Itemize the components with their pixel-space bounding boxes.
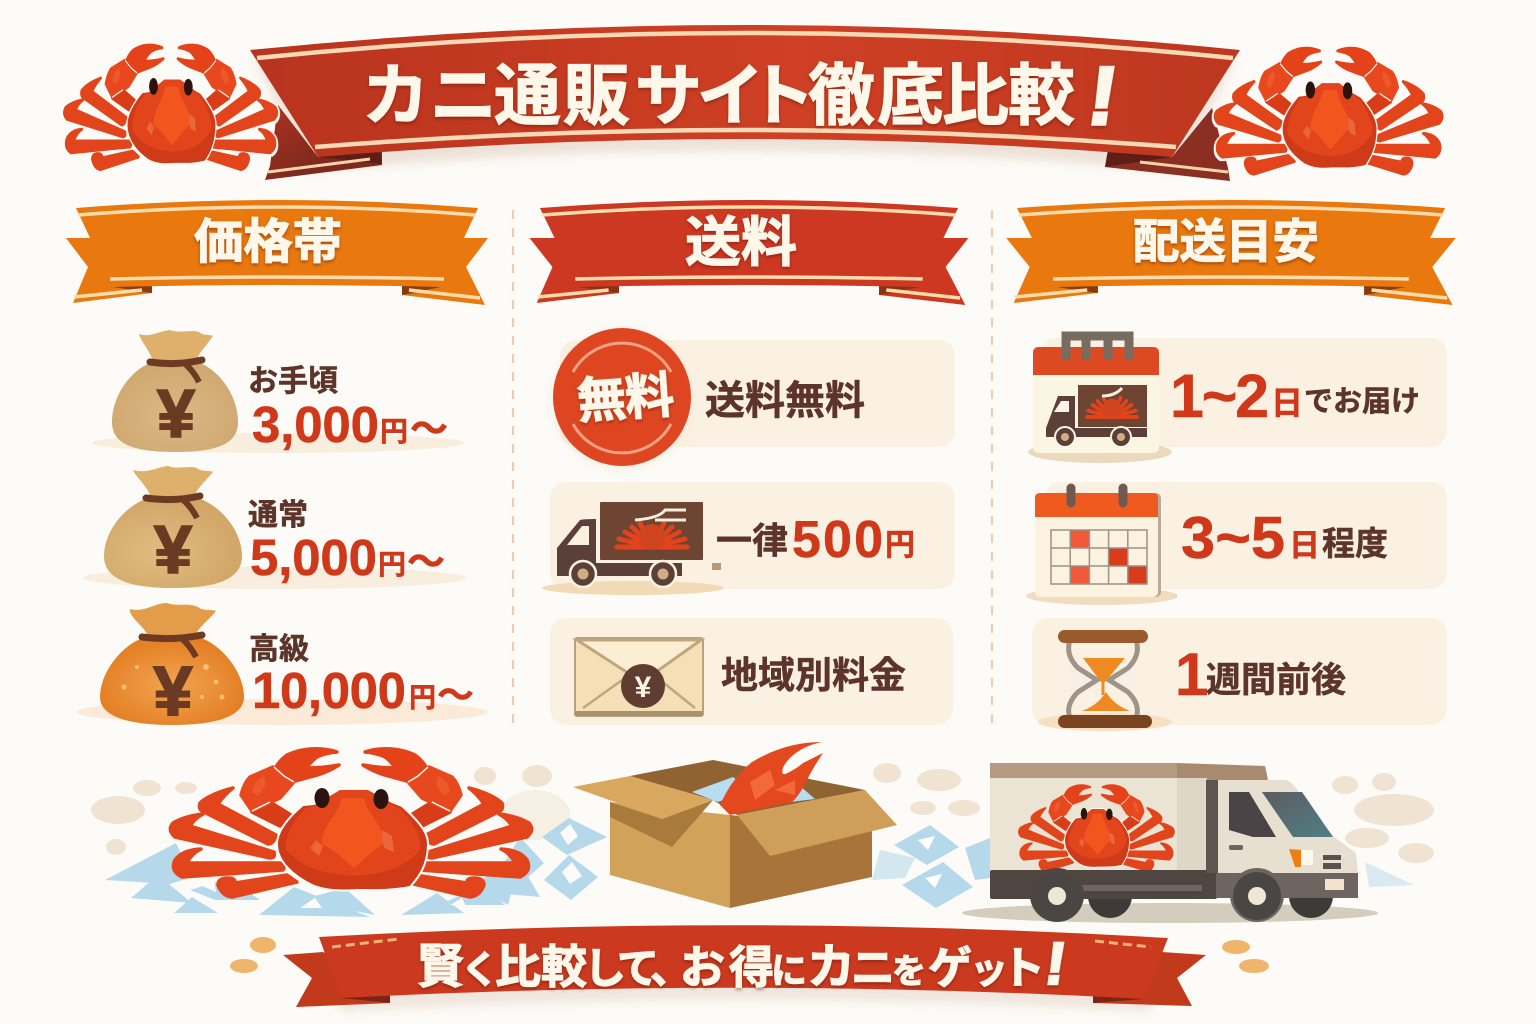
- banner tails: [265, 105, 1230, 181]
- icon: envelope: [575, 638, 703, 716]
- column: price: [66, 200, 488, 730]
- panel: [560, 340, 955, 447]
- label: お手頃: [248, 356, 338, 400]
- heading ribbon: delivery: 配送目安: [1133, 203, 1319, 272]
- banner shadow: [330, 942, 1160, 1012]
- divider left: [512, 210, 514, 728]
- shadow: [77, 699, 487, 725]
- box interior: [630, 760, 865, 815]
- slogan: ト: [1001, 932, 1045, 996]
- scene: beige blobs: [91, 763, 1434, 863]
- crab right: [1215, 48, 1442, 174]
- crab claw: [720, 742, 823, 815]
- box front: [610, 802, 730, 908]
- unit: 日: [1271, 378, 1303, 424]
- icon: calendar: [1026, 488, 1178, 605]
- icon: money bag large: [100, 603, 244, 730]
- label: 高級: [249, 624, 309, 668]
- slogan: カ: [807, 927, 855, 997]
- wheels: [1030, 868, 1284, 922]
- number: 3~5: [1181, 505, 1285, 571]
- icon: money bag medium: [104, 466, 242, 588]
- banner shadow: [255, 35, 1235, 172]
- item: premium: [77, 603, 487, 730]
- slogan: して、: [584, 935, 692, 996]
- text: 程度: [1322, 517, 1388, 565]
- slogan: を: [892, 944, 926, 993]
- badge: free: 無料: [574, 356, 676, 433]
- ice in box: [692, 777, 815, 802]
- windshield: [1262, 792, 1333, 837]
- divider right: [991, 210, 993, 728]
- slogan: お得: [680, 931, 774, 996]
- item: affordable: [92, 330, 464, 453]
- slogan: 賢: [417, 928, 464, 997]
- banner body: [250, 25, 1240, 157]
- slogan: ッ: [970, 939, 1008, 994]
- panel: [550, 482, 955, 589]
- item: regional: [550, 618, 953, 725]
- text: 送料無料: [705, 368, 865, 426]
- shadow: [83, 567, 467, 589]
- chassis: [990, 870, 1217, 899]
- crab bottom: [170, 749, 532, 897]
- title exclamation: !: [1083, 50, 1123, 142]
- panel: [1040, 338, 1447, 447]
- slogan exclamation: !: [1041, 929, 1071, 997]
- text: 地域別料金: [721, 645, 906, 699]
- number: 1: [1175, 641, 1208, 708]
- price: 500: [792, 511, 883, 569]
- price: 10,000: [252, 662, 406, 719]
- text: 週間前後: [1206, 652, 1346, 703]
- icon: envelope: ¥: [635, 671, 652, 704]
- icon: money bag medium: ¥: [154, 512, 192, 588]
- icon: money bag small: [112, 330, 238, 452]
- shadow: [92, 433, 464, 453]
- item: about 1 week: [1032, 618, 1447, 731]
- heading ribbon: shipping: [530, 198, 968, 305]
- unit: 円: [380, 410, 408, 450]
- panel: [1045, 482, 1447, 589]
- item: 3-5 days: [1026, 482, 1447, 605]
- heading ribbon: delivery: [1006, 200, 1456, 305]
- side window: [1229, 792, 1276, 837]
- cab: [1206, 780, 1358, 873]
- item: 1-2 days: [1028, 336, 1447, 463]
- scene: ice left: [105, 818, 607, 917]
- unit: 日: [1289, 520, 1320, 565]
- crab logo: [1019, 785, 1174, 871]
- scene: ice right: [872, 825, 1414, 908]
- ground shadow: [962, 903, 1378, 923]
- slogan: 比較: [495, 931, 587, 997]
- slogan: に: [771, 942, 807, 994]
- panel: [550, 618, 953, 725]
- sparkles: [122, 664, 224, 700]
- icon: calendar truck: [1028, 336, 1172, 463]
- heading ribbon: shipping: 送料: [685, 198, 797, 277]
- text: 一律: [716, 512, 788, 564]
- unit: 円: [378, 543, 406, 583]
- coins left: [230, 937, 276, 973]
- column: shipping: [530, 198, 968, 725]
- rear inner wheels: [1088, 874, 1333, 918]
- column: delivery: [1006, 200, 1456, 731]
- box with claw: [573, 742, 897, 908]
- slogan: く: [461, 939, 499, 994]
- item: free shipping: [553, 328, 955, 468]
- badge: free: [553, 328, 691, 468]
- title: カニ通販サイト徹底比較: [362, 42, 1075, 139]
- price: 5,000: [250, 529, 377, 586]
- price: 3,000: [252, 396, 379, 453]
- icon: money bag small: ¥: [157, 376, 195, 452]
- item: flat rate: [542, 482, 955, 595]
- item: regular: [83, 466, 467, 589]
- box flaps: [573, 776, 713, 819]
- box side: [730, 815, 872, 908]
- number: 1~2: [1170, 362, 1269, 430]
- icon: truck: [542, 502, 724, 595]
- crab left: [64, 45, 277, 170]
- label: 通常: [248, 490, 308, 534]
- handle, lights, grille, plate: [1229, 845, 1344, 890]
- ice flecks: [200, 824, 582, 908]
- tilde: 〜: [407, 531, 445, 586]
- banner body: [319, 925, 1168, 999]
- slogan: ゲ: [928, 932, 972, 996]
- cargo box: [990, 763, 1180, 870]
- panel: [1032, 618, 1447, 725]
- icon: money bag large: ¥: [154, 652, 193, 730]
- slogan: ニ: [851, 932, 895, 996]
- coins right: [1222, 940, 1269, 973]
- tilde: 〜: [437, 665, 474, 719]
- title banner: [250, 25, 1240, 181]
- text: でお届け: [1304, 378, 1420, 420]
- unit: 円: [409, 676, 436, 715]
- tilde: 〜: [410, 398, 448, 453]
- delivery truck: [962, 763, 1378, 923]
- icon: hourglass: [1038, 630, 1172, 731]
- unit: 円: [885, 520, 915, 564]
- heading ribbon: price: [66, 200, 488, 305]
- tails: [283, 952, 1206, 1007]
- bottom banner: [283, 925, 1206, 1012]
- heading ribbon: price: 価格帯: [194, 202, 342, 272]
